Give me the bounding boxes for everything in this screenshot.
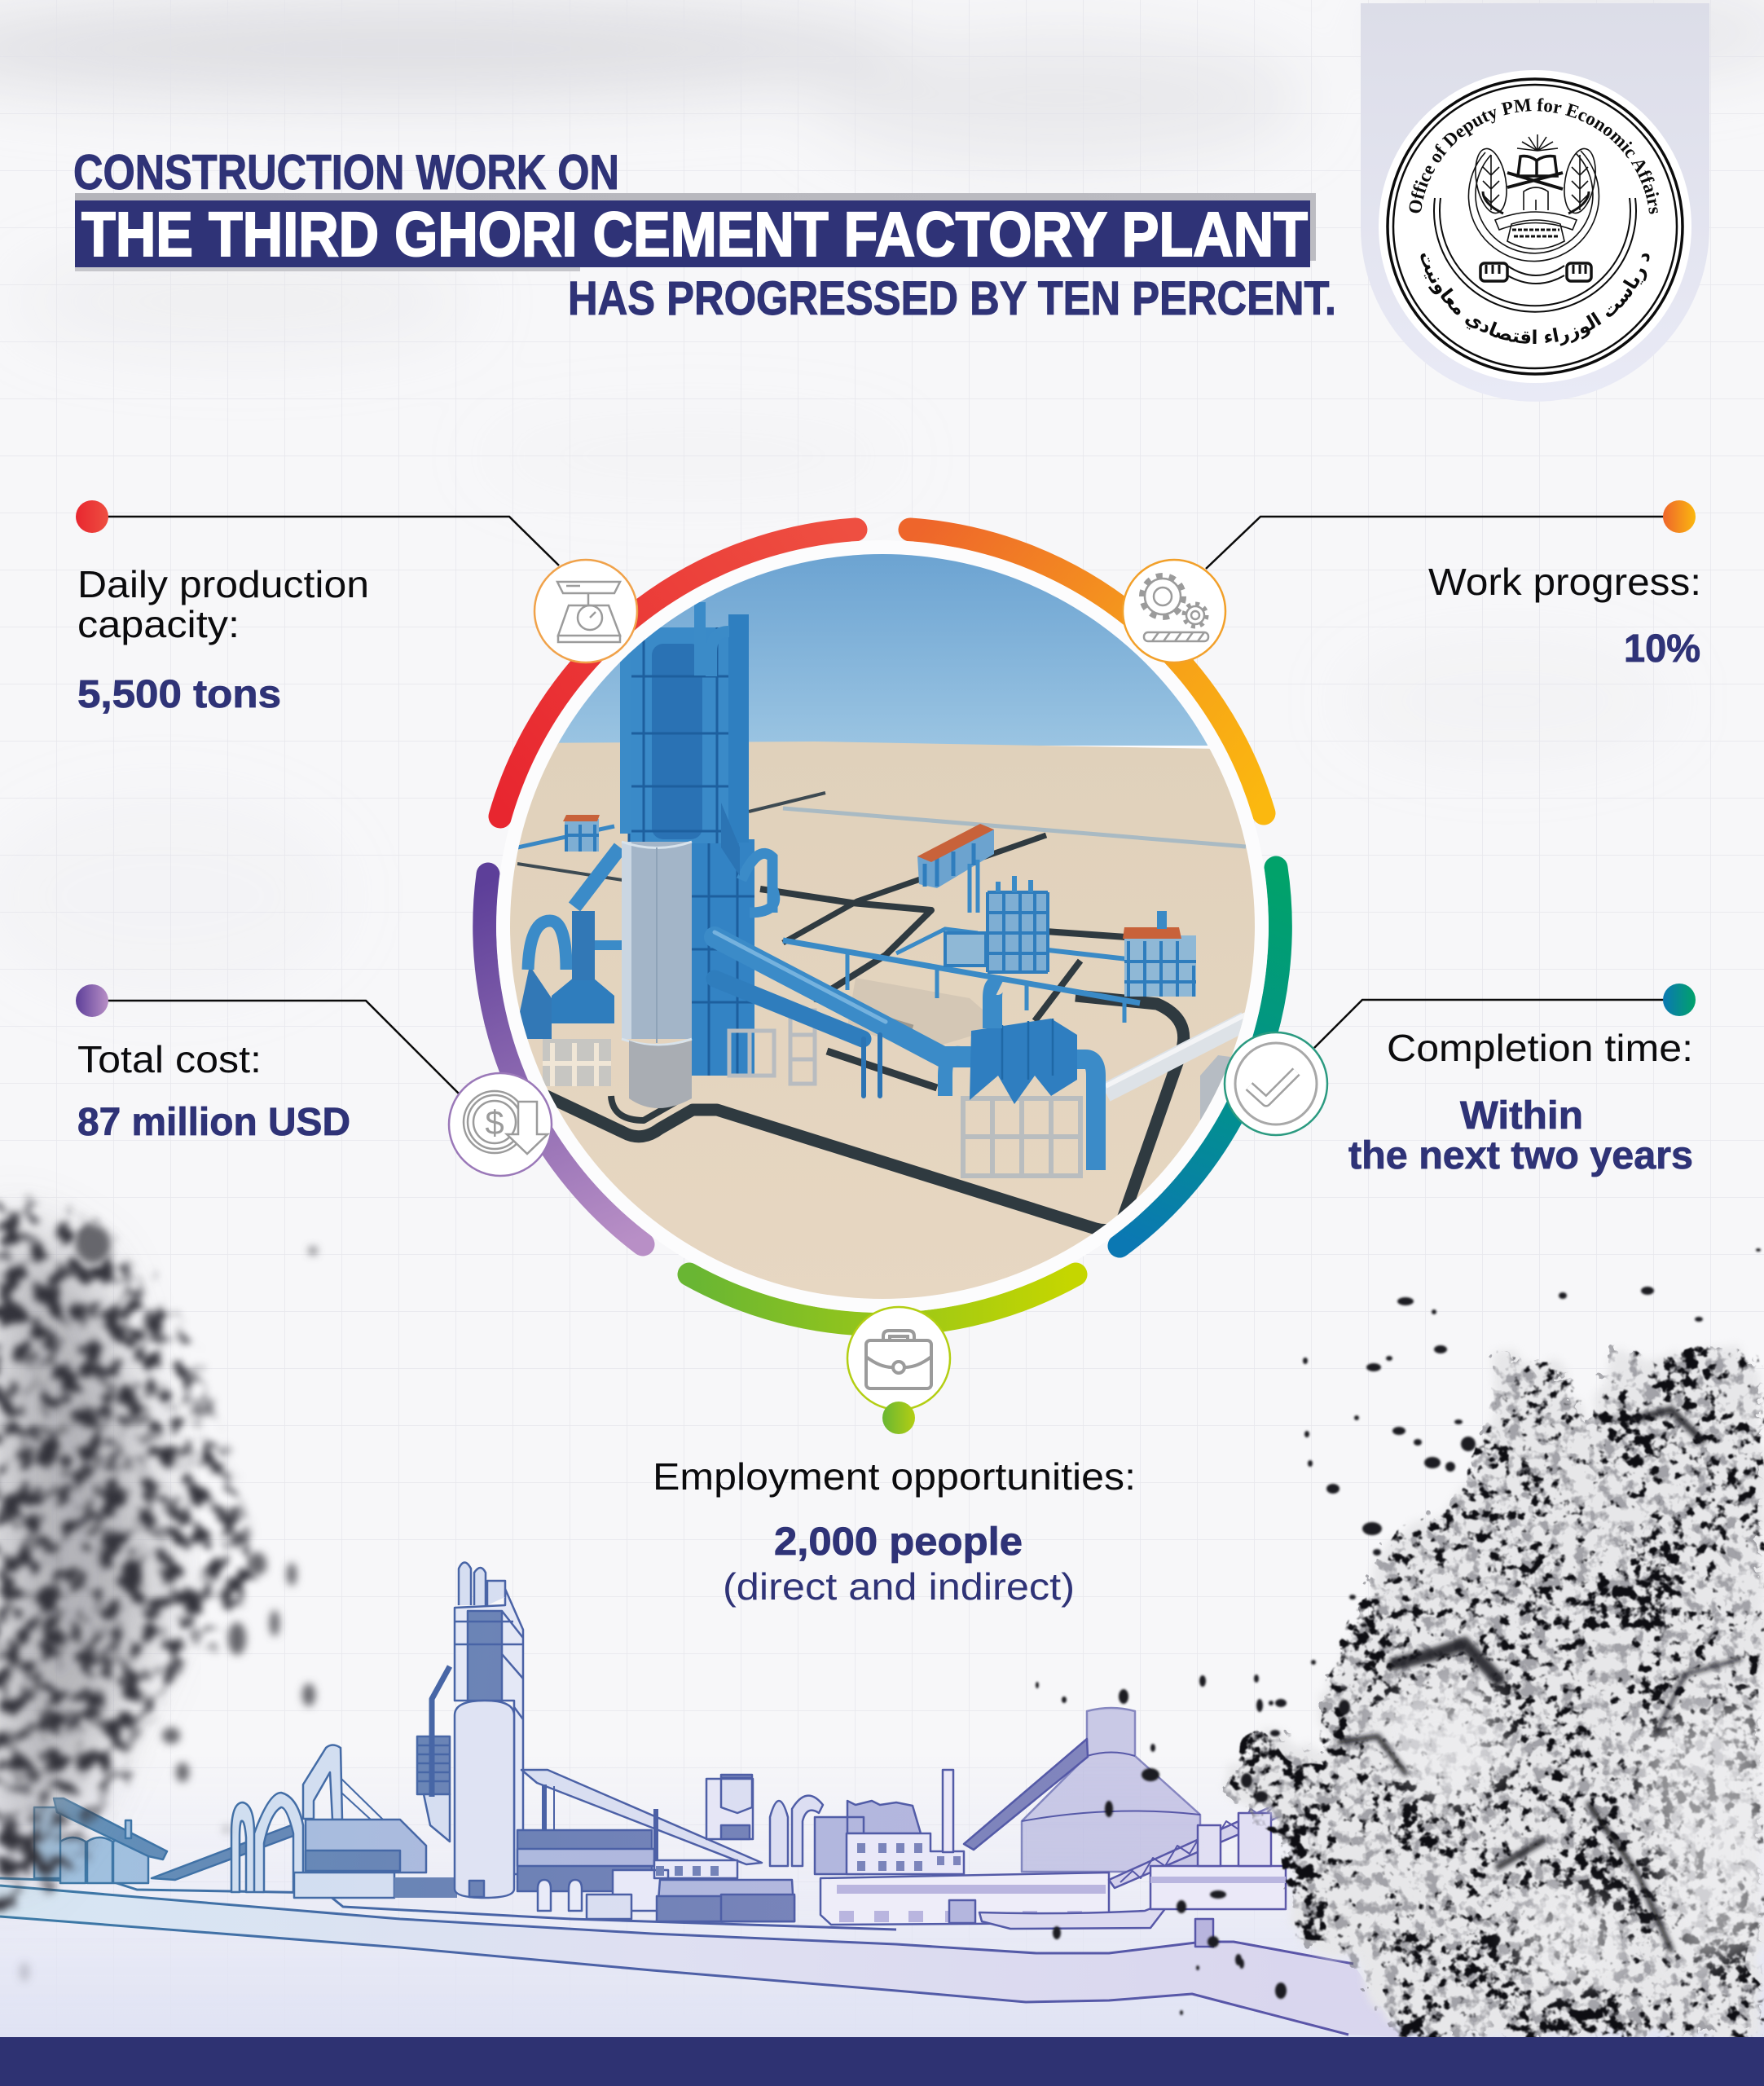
shadow on ground xyxy=(848,978,986,1045)
value: 2,000 people xyxy=(774,1520,1023,1564)
marker dot xyxy=(1663,500,1696,533)
mid building xyxy=(847,1833,964,1874)
value line 1: Within xyxy=(1460,1094,1583,1138)
connector line xyxy=(92,1001,459,1094)
main silo tower xyxy=(455,1701,514,1898)
right building xyxy=(1150,1866,1286,1909)
callout: daily production capacity xyxy=(76,500,559,716)
title line 1: CONSTRUCTION WORK ON xyxy=(73,145,619,200)
seal disc xyxy=(1379,70,1691,383)
supporting stands xyxy=(729,1010,815,1084)
label text: Employment opportunities: xyxy=(653,1455,1136,1498)
icon: checkmark xyxy=(1225,1032,1327,1135)
preheater block xyxy=(517,1830,652,1891)
seal rings xyxy=(1388,79,1683,374)
marker dot xyxy=(76,500,108,533)
orange roof building, left xyxy=(563,815,600,852)
left silos xyxy=(34,1807,148,1883)
roads xyxy=(538,835,1184,1230)
label text: Daily production xyxy=(77,563,369,605)
label text: Total cost: xyxy=(77,1038,262,1080)
icon: gears and conveyor xyxy=(1123,560,1225,662)
connector line xyxy=(92,517,559,566)
ground lines xyxy=(0,1878,1353,2035)
process frame xyxy=(945,876,1048,972)
kiln building xyxy=(306,1820,426,1873)
marker dot xyxy=(1663,984,1696,1016)
marker dot xyxy=(76,984,108,1017)
tower steel structure xyxy=(620,602,775,1076)
left hopper unit xyxy=(514,847,627,1086)
seal arabic text: د ریاست الوزراء اقتصادي معاونیت xyxy=(1421,253,1649,346)
icon: dollar with down arrow xyxy=(449,1073,552,1176)
tower fins xyxy=(417,1736,450,1794)
central low buildings xyxy=(613,1860,737,1911)
stack xyxy=(943,1770,953,1852)
label text line 2: capacity: xyxy=(77,603,240,645)
white ring xyxy=(496,540,1269,1313)
value: 87 million USD xyxy=(77,1101,350,1144)
title line 3: HAS PROGRESSED BY TEN PERCENT. xyxy=(568,272,1336,325)
marker dot: employment xyxy=(882,1402,915,1434)
value: 10% xyxy=(1624,627,1700,671)
icon: weighing scale xyxy=(534,560,637,662)
label text: Work progress: xyxy=(1428,561,1701,603)
twin small tanks xyxy=(538,1880,582,1911)
long building xyxy=(820,1873,1109,1925)
value line 2: the next two years xyxy=(1348,1134,1693,1177)
logo panel xyxy=(1361,3,1709,402)
concrete base xyxy=(629,1041,692,1108)
seal english text: Office of Deputy PM for Economic Affairs xyxy=(1410,98,1659,213)
connector line xyxy=(1206,517,1679,569)
arch pipes xyxy=(231,1793,303,1892)
light rock faces xyxy=(1377,1679,1764,1984)
orange roof building, right xyxy=(1123,911,1196,997)
rising conveyor xyxy=(521,1770,762,1864)
connector line xyxy=(1314,1000,1679,1048)
dark speckle xyxy=(1225,1347,1764,2037)
white duct xyxy=(1106,1021,1246,1093)
process tower xyxy=(706,1779,753,1839)
callout: completion time xyxy=(1314,984,1696,1177)
orange roof building, centre xyxy=(917,824,994,913)
title xyxy=(73,145,1336,325)
dark cracks xyxy=(1339,1410,1740,1950)
road band xyxy=(0,1886,1401,2037)
pipe rack xyxy=(783,929,1149,1023)
colored ring segments xyxy=(485,530,1280,1324)
glass cylinder xyxy=(622,842,692,1045)
seal emblem xyxy=(1468,134,1600,284)
window block xyxy=(656,1866,719,1876)
callout: total cost xyxy=(76,984,459,1144)
cement dust, lower right xyxy=(1036,1248,1764,2037)
diagonal ducts xyxy=(715,932,970,1096)
big silo xyxy=(1022,1708,1200,1872)
filter house xyxy=(945,985,1096,1176)
title band: THE THIRD GHORI CEMENT FACTORY PLANT xyxy=(81,200,1308,270)
left conveyor belts xyxy=(54,1798,300,1880)
right silo xyxy=(1200,1055,1230,1123)
value note: (direct and indirect) xyxy=(723,1565,1075,1608)
low curved hull xyxy=(979,1900,1172,1929)
plant rendering photo xyxy=(505,546,1263,1304)
mid-tone mottling xyxy=(1225,1347,1764,2037)
callout: work progress xyxy=(1206,500,1701,671)
cement dust, lower left xyxy=(0,1198,317,1982)
callout: employment opportunities xyxy=(653,1455,1136,1608)
value: 5,500 tons xyxy=(77,673,281,716)
illustration: cement factory skyline xyxy=(0,1563,1401,2037)
bottom banner xyxy=(0,2037,1764,2086)
truss conveyor xyxy=(1109,1785,1320,1888)
tower structure xyxy=(455,1589,523,1874)
thin service pipes xyxy=(783,808,1246,847)
icon: briefcase xyxy=(847,1307,950,1410)
label text: Completion time: xyxy=(1387,1027,1693,1069)
scattered particles xyxy=(1036,1248,1761,2015)
icon: dollar with down arrow: $ xyxy=(485,1103,504,1142)
